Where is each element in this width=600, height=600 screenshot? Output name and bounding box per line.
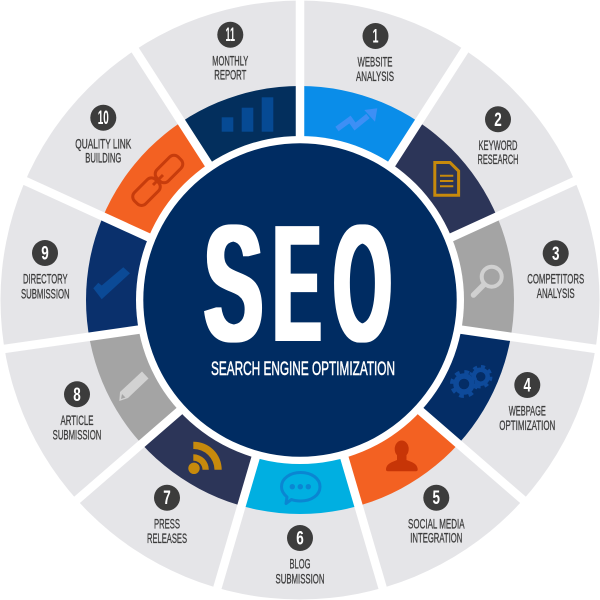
label <box>408 516 465 546</box>
label: SOCIAL MEDIA <box>408 516 465 531</box>
label <box>478 138 518 167</box>
label <box>21 272 70 301</box>
icon: gears <box>452 367 491 396</box>
segment 2: keyword research <box>435 106 518 195</box>
number 2: 2 <box>494 110 502 131</box>
label <box>75 136 131 166</box>
label: ARTICLE <box>60 413 94 428</box>
segment 9: directory submission <box>21 240 130 301</box>
subtitle: SEARCH ENGINE OPTIMIZATION <box>211 359 395 380</box>
label <box>527 272 584 301</box>
label: PRESS <box>154 516 180 531</box>
icon: chain link <box>130 153 185 208</box>
label <box>276 557 324 586</box>
label: OPTIMIZATION <box>499 418 555 433</box>
label: SUBMISSION <box>53 428 101 443</box>
icon: magnifier <box>474 267 502 295</box>
label <box>53 413 101 443</box>
icon: trend arrow <box>337 108 377 129</box>
centre circle <box>143 143 457 457</box>
icon: chat bubble <box>282 472 320 504</box>
segment 11: monthly report <box>212 22 273 132</box>
label: RELEASES <box>147 531 187 546</box>
title: SEO: E <box>273 191 321 377</box>
title: SEO: S <box>204 191 263 377</box>
label: WEBPAGE <box>509 403 546 418</box>
text: O <box>334 191 392 377</box>
band 4 <box>423 334 510 441</box>
number 3: 3 <box>552 244 559 265</box>
number 11: 11 <box>226 25 235 46</box>
icon: RSS <box>188 442 222 474</box>
label <box>356 55 394 84</box>
label: BLOG <box>290 557 310 572</box>
label: WEBSITE <box>358 55 392 70</box>
icon: document <box>435 162 459 195</box>
number 10: 10 <box>98 108 109 129</box>
label: DIRECTORY <box>23 272 68 287</box>
label: REPORT <box>214 68 246 83</box>
label: ANALYSIS <box>356 69 394 84</box>
band 5 <box>348 414 456 505</box>
band 8 <box>90 334 176 440</box>
segment 3: competitors analysis <box>474 240 584 301</box>
label <box>212 53 248 83</box>
label: INTEGRATION <box>410 531 462 546</box>
icon: bar chart <box>222 97 273 132</box>
title: SEO <box>204 191 392 377</box>
label <box>499 403 555 433</box>
band 1 <box>304 86 415 162</box>
band 3 <box>453 220 514 333</box>
band 6 <box>246 458 354 514</box>
segment 4: webpage optimization <box>452 367 555 433</box>
number 9: 9 <box>41 244 49 264</box>
number 1: 1 <box>372 26 379 48</box>
label: RESEARCH <box>478 152 518 167</box>
band 11 <box>185 86 296 162</box>
number 5: 5 <box>433 488 440 509</box>
segment 10: quality link building <box>75 105 185 208</box>
band 2 <box>395 124 496 234</box>
segment 5: social media integration <box>386 440 465 546</box>
label <box>147 516 187 546</box>
number 7: 7 <box>163 488 171 509</box>
icon: pencil <box>119 372 148 401</box>
band 7 <box>144 414 252 505</box>
band 10 <box>104 124 205 234</box>
band 9 <box>86 220 147 332</box>
label: SUBMISSION <box>21 286 70 301</box>
label: SUBMISSION <box>276 571 324 586</box>
label: KEYWORD <box>478 138 518 153</box>
number 8: 8 <box>73 385 81 406</box>
segment 6: blog submission <box>276 472 324 586</box>
segment 8: article submission <box>53 372 148 443</box>
number 6: 6 <box>296 528 304 550</box>
segment 1: website analysis <box>337 23 394 129</box>
number 4: 4 <box>524 376 531 396</box>
label: MONTHLY <box>212 53 248 68</box>
label: BUILDING <box>85 151 121 166</box>
label: ANALYSIS <box>537 286 575 301</box>
label: QUALITY LINK <box>75 136 131 151</box>
icon: check mark <box>93 267 130 299</box>
icon: person <box>386 440 418 471</box>
segment 7: press releases <box>147 442 222 546</box>
coloured inner band <box>86 86 514 514</box>
